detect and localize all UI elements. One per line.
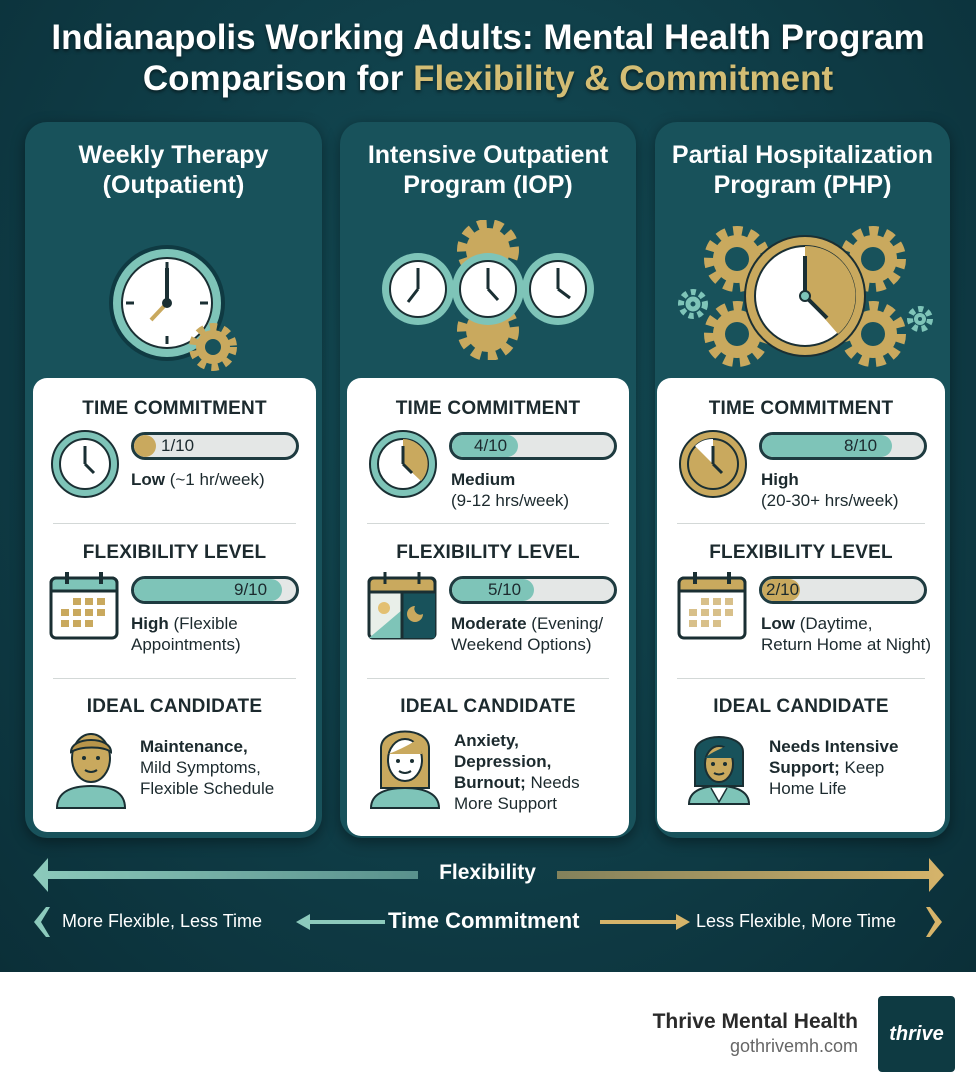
label: less flexible: Less Flexible, More Time — [696, 911, 896, 931]
panel: PHP — [655, 122, 950, 838]
text: high — [131, 614, 241, 654]
heading: flexibility: FLEXIBILITY LEVEL — [83, 542, 266, 563]
heading: time commitment: TIME COMMITMENT — [82, 398, 267, 419]
text: moderate: Moderate (Evening/ — [451, 614, 603, 633]
bar: 5/10: 5/10 — [488, 580, 521, 599]
text: candidate — [769, 737, 898, 798]
bar: 4/10: 4/10 — [474, 436, 507, 455]
panel heading: IOP: Program (IOP) — [403, 171, 573, 199]
icon: three clocks with gears — [382, 220, 594, 360]
text: low: Return Home at Night) — [761, 635, 931, 654]
bar: 9/10 — [131, 576, 299, 604]
heading: flexibility: FLEXIBILITY LEVEL — [396, 542, 580, 563]
text: moderate — [451, 614, 604, 654]
bar: 2/10 — [759, 576, 927, 604]
title: Indianapolis Working Adults: Mental Health Program — [51, 18, 925, 57]
text: low: Low (~1 hr/week) — [131, 470, 265, 489]
text: low — [761, 614, 931, 654]
arrows: flexibility and time commitment — [33, 858, 944, 937]
logo: thrive: thrive — [889, 1023, 944, 1045]
bar: 1/10 — [131, 432, 299, 460]
icon: day/night calendar — [368, 572, 436, 640]
text: candidate: Mild Symptoms, — [140, 758, 261, 777]
text: medium: (9-12 hrs/week) — [451, 491, 569, 510]
text: candidate: Anxiety, — [454, 731, 519, 750]
title — [51, 18, 925, 100]
text: low: Low (Daytime, — [761, 614, 872, 633]
panel heading: weekly therapy: (Outpatient) — [103, 171, 244, 199]
heading: ideal candidate: IDEAL CANDIDATE — [87, 696, 262, 717]
text: candidate: Needs Intensive — [769, 737, 898, 756]
label: time commitment: Time Commitment — [388, 908, 580, 933]
heading: flexibility: FLEXIBILITY LEVEL — [709, 542, 893, 563]
icon: calendar — [50, 572, 118, 640]
bar: 5/10 — [449, 576, 617, 604]
panel heading: IOP: Intensive Outpatient — [368, 141, 608, 169]
icon: man — [56, 733, 126, 809]
text: candidate: More Support — [454, 794, 557, 813]
bar: 9/10: 9/10 — [234, 580, 267, 599]
label: flexibility: Flexibility — [439, 861, 536, 884]
text: high: High — [761, 470, 799, 489]
icon: clock with gear — [109, 245, 237, 371]
text: medium — [451, 470, 569, 510]
icon: clock — [369, 430, 437, 498]
panel: weekly therapy — [25, 122, 322, 838]
heading: ideal candidate: IDEAL CANDIDATE — [713, 696, 889, 717]
card: weekly therapy details — [33, 378, 316, 832]
icon: woman — [370, 730, 440, 809]
card: IOP details — [347, 378, 629, 836]
bar: 8/10 — [759, 432, 927, 460]
card: PHP details — [657, 378, 945, 832]
text: high: (20-30+ hrs/week) — [761, 491, 898, 510]
label: more flexible: More Flexible, Less Time — [62, 911, 262, 931]
text: candidate — [140, 737, 274, 798]
text: candidate — [454, 731, 580, 813]
footer brand text — [652, 1010, 858, 1056]
heading: time commitment: TIME COMMITMENT — [709, 398, 893, 419]
text: high: High (Flexible — [131, 614, 238, 633]
panel heading: PHP — [672, 141, 933, 199]
icon: clock — [679, 430, 747, 498]
text: candidate: Flexible Schedule — [140, 779, 274, 798]
icon: calendar — [678, 572, 746, 640]
text: candidate: Maintenance, — [140, 737, 248, 756]
panel heading: weekly therapy — [78, 141, 268, 199]
heading: ideal candidate: IDEAL CANDIDATE — [400, 696, 576, 717]
panel heading: PHP: Partial Hospitalization — [672, 141, 933, 169]
panel heading: IOP — [368, 141, 608, 199]
panel heading: weekly therapy: Weekly Therapy — [79, 141, 268, 169]
text: high — [761, 470, 898, 510]
text: medium: Medium — [451, 470, 515, 489]
icon: clock — [51, 430, 119, 498]
bar: 2/10: 2/10 — [766, 580, 799, 599]
text: moderate: Weekend Options) — [451, 635, 591, 654]
heading: time commitment: TIME COMMITMENT — [396, 398, 580, 419]
bar: 4/10 — [449, 432, 617, 460]
bar: 8/10: 8/10 — [844, 436, 877, 455]
title: Comparison for Flexibility & Commitment — [143, 59, 833, 98]
footer brand text: Thrive Mental Health — [653, 1010, 858, 1033]
text: candidate: Home Life — [769, 779, 846, 798]
panel: IOP — [340, 122, 636, 838]
text: candidate: Burnout; Needs — [454, 773, 580, 792]
text: candidate: Depression, — [454, 752, 551, 771]
text: high: Appointments) — [131, 635, 241, 654]
panel heading: PHP: Program (PHP) — [714, 171, 891, 199]
logo: thrive — [878, 996, 955, 1072]
icon: large clock with gears — [678, 226, 933, 367]
bar: 1/10: 1/10 — [161, 436, 194, 455]
icon: woman professional — [688, 736, 750, 805]
footer brand text: gothrivemh.com — [730, 1036, 858, 1056]
text: candidate: Support; Keep — [769, 758, 884, 777]
